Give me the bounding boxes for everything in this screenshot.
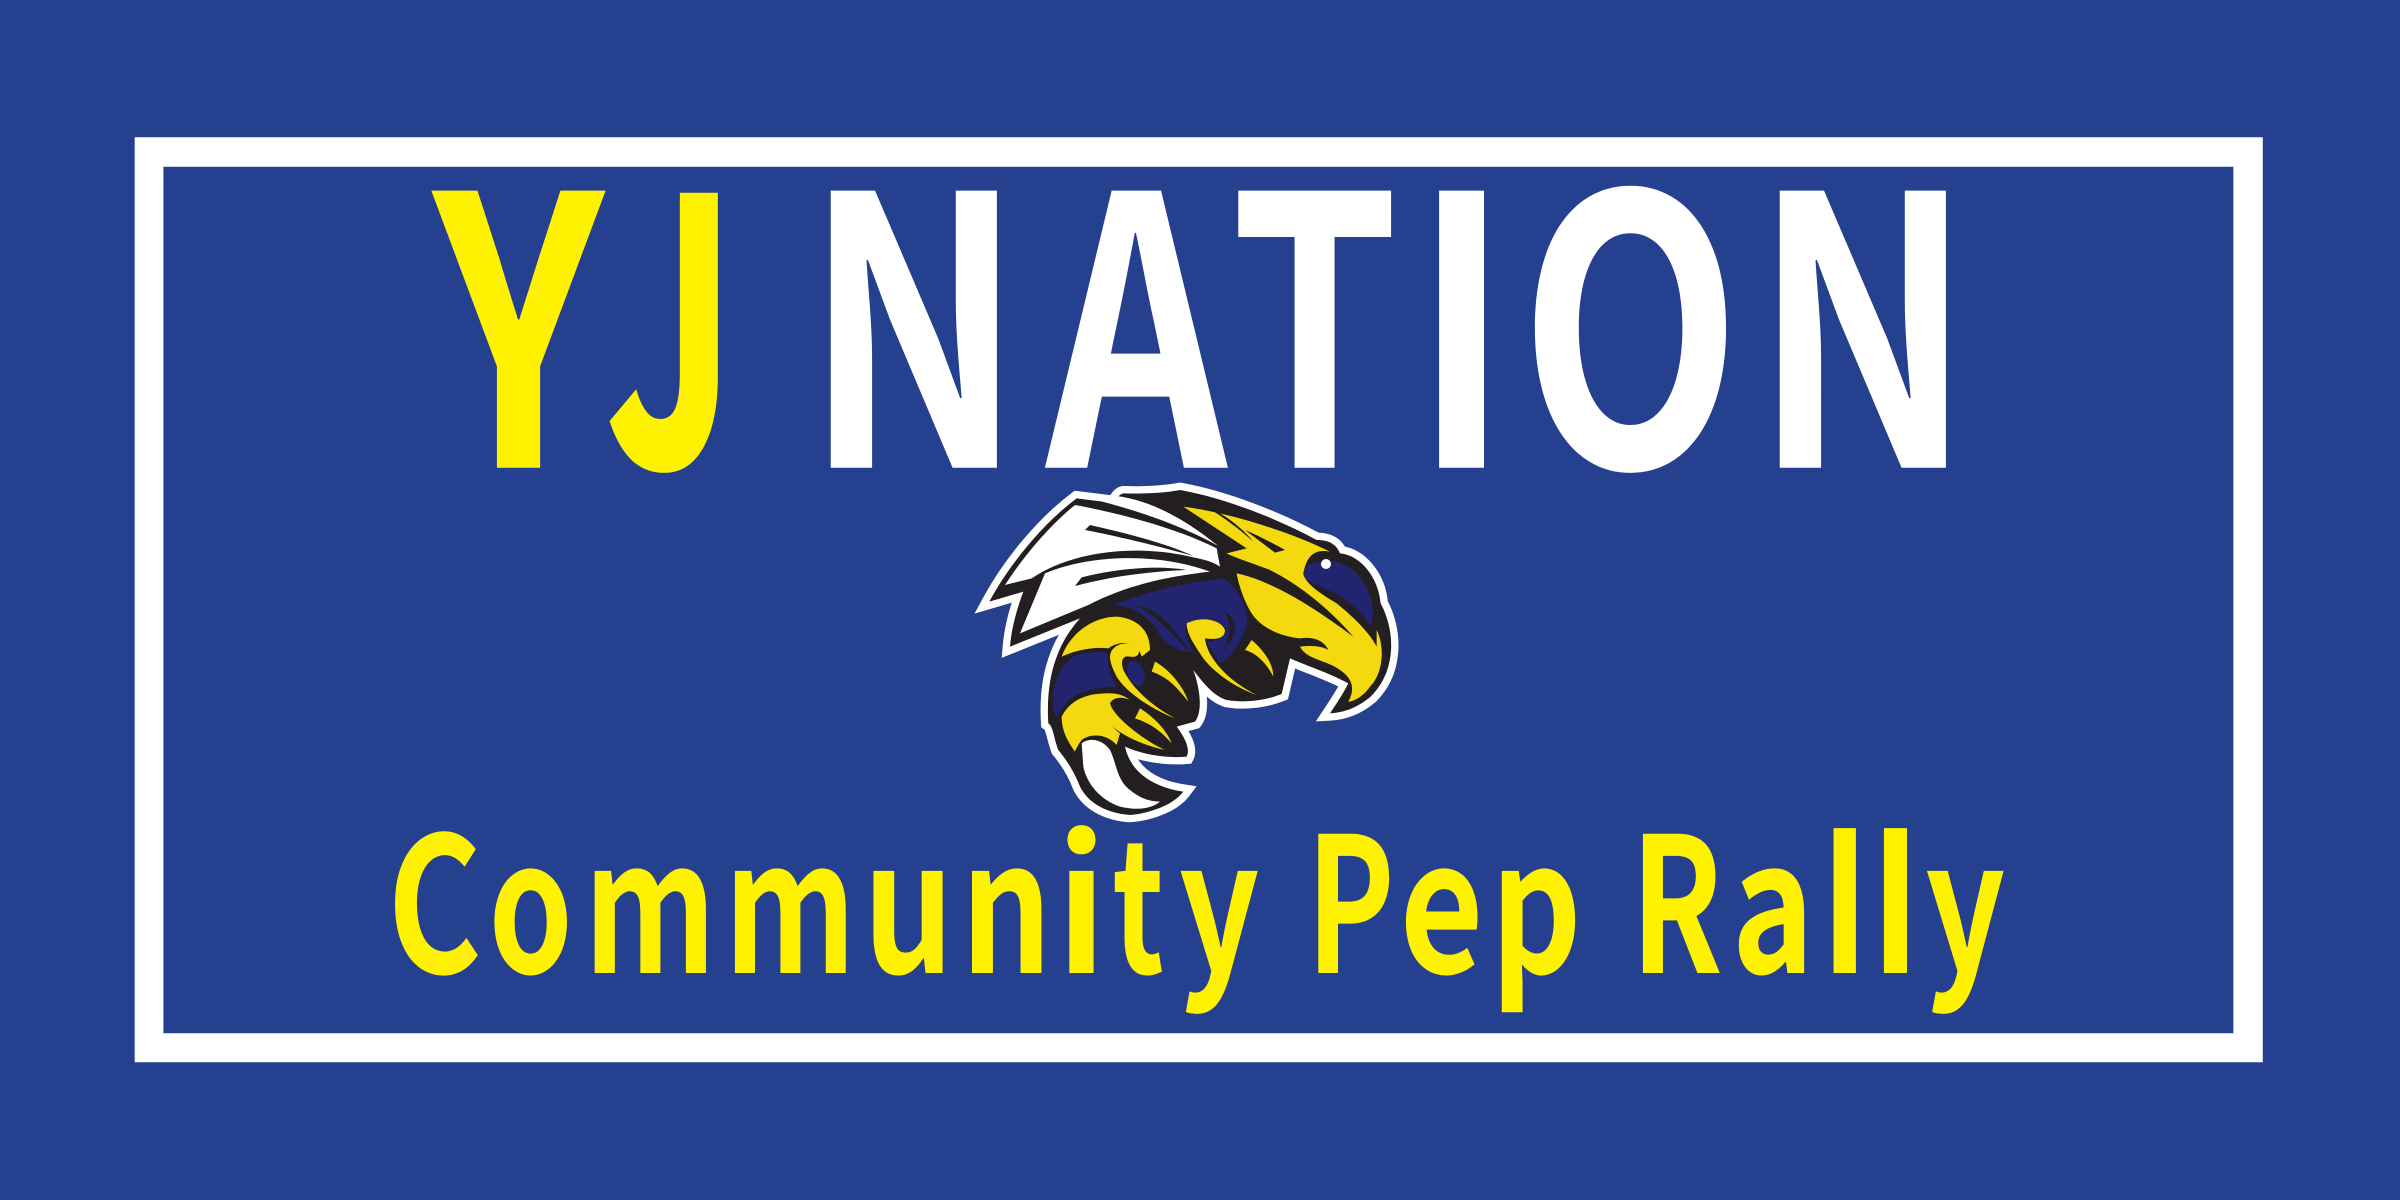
front leg navy spot xyxy=(1124,658,1148,689)
subtitle word: Community: C xyxy=(387,756,482,1028)
subtitle word: Community: i xyxy=(1056,762,1106,1027)
wing top strip xyxy=(1093,496,1218,546)
title word: NATION: N xyxy=(1753,34,1973,576)
head yellow xyxy=(1183,507,1382,702)
subtitle word: Pep: p xyxy=(1491,762,1582,1026)
subtitle word: Community: t xyxy=(1112,762,1164,1026)
title word: NATION: O xyxy=(1519,34,1742,576)
title word: NATION xyxy=(804,33,1973,576)
title word: YJ xyxy=(429,34,735,576)
title word: NATION: N xyxy=(804,34,1024,576)
middle leg yellow xyxy=(1187,619,1273,695)
subtitle word: Community: y xyxy=(1179,762,1260,1026)
title: YJ NATION xyxy=(429,33,1973,576)
thorax swirl xyxy=(1133,605,1235,652)
abdomen yellow top xyxy=(1062,617,1150,657)
front leg yellow xyxy=(1095,643,1188,750)
title word: YJ: Y xyxy=(429,34,608,576)
icon: hornet mascot logo xyxy=(989,490,1391,815)
subtitle word: Community: n xyxy=(961,762,1052,1027)
subtitle word: Rally: y xyxy=(1925,761,2005,1026)
subtitle word: Community: u xyxy=(863,762,954,1027)
subtitle word: Community: o xyxy=(488,763,573,1026)
subtitle word: Pep xyxy=(1306,755,1582,1027)
mascot silhouette with white outline xyxy=(989,490,1391,815)
title word: NATION: A xyxy=(1042,35,1231,576)
subtitle word: Community: m xyxy=(724,763,856,1026)
subtitle word: Pep: e xyxy=(1400,762,1484,1026)
abdomen navy xyxy=(1053,652,1117,717)
title word: YJ: J xyxy=(608,45,735,568)
subtitle word: Rally: l xyxy=(1822,792,1867,1016)
eye xyxy=(1303,561,1373,627)
white frame xyxy=(135,137,2263,1062)
title word: NATION: I xyxy=(1412,35,1512,576)
wing slits xyxy=(1075,525,1193,586)
subtitle word: Pep: P xyxy=(1306,755,1395,1027)
abdomen yellow lower xyxy=(1062,693,1120,752)
thorax navy xyxy=(1113,578,1247,663)
head slits xyxy=(1203,505,1285,553)
wing lower xyxy=(1020,558,1210,633)
subtitle word: Community xyxy=(387,756,1260,1028)
title word: NATION: T xyxy=(1230,33,1399,575)
subtitle word: Community: m xyxy=(584,763,716,1026)
subtitle: Community Pep Rally xyxy=(387,755,2005,1028)
subtitle word: Rally: l xyxy=(1872,793,1919,1016)
subtitle word: Rally: a xyxy=(1732,762,1814,1026)
subtitle word: Rally: R xyxy=(1631,756,1723,1028)
subtitle word: Rally xyxy=(1631,756,2005,1028)
stinger white xyxy=(1082,740,1160,809)
wing upper xyxy=(1005,505,1220,585)
